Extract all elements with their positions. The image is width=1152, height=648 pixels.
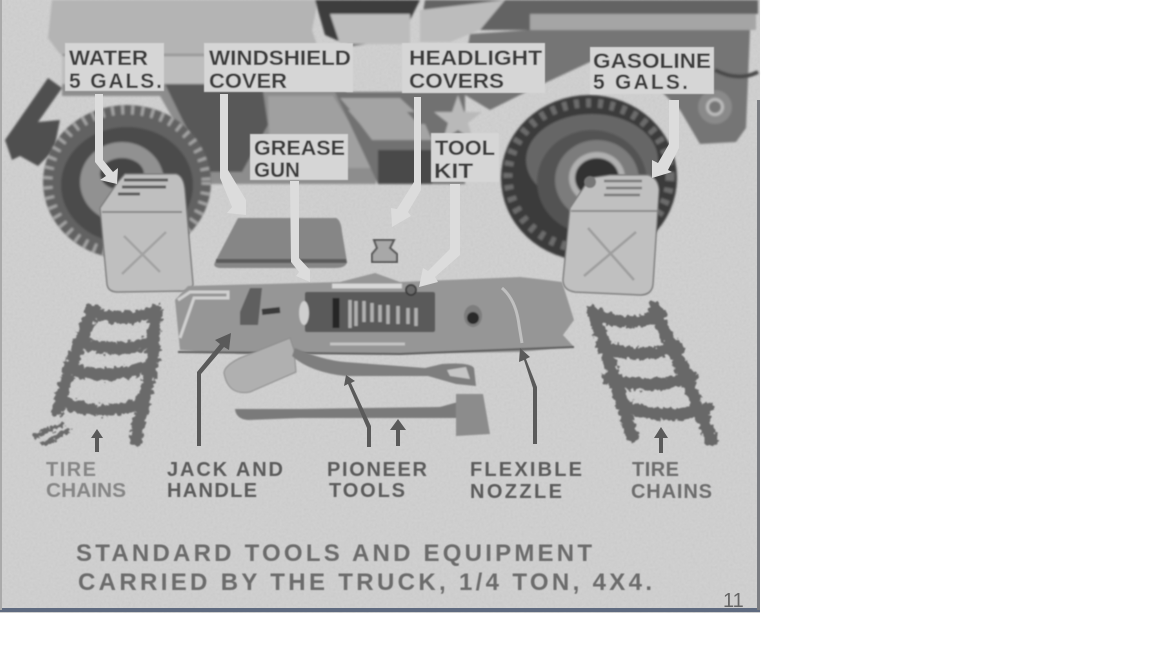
white arrow: gasoline: [652, 100, 679, 178]
jeep hood: [48, 0, 320, 54]
caption: STANDARD TOOLS AND EQUIPMENT: [76, 540, 592, 567]
arrow: flexible nozzle: [519, 348, 537, 444]
label: water 5 gals: [65, 43, 164, 93]
label: pioneer tools: [327, 459, 428, 502]
label: pioneer tools: PIONEER: [327, 459, 428, 481]
left spare wheel: [43, 105, 211, 259]
label: windshield cover: WINDSHIELD: [209, 47, 351, 70]
shovel: [224, 338, 476, 393]
page number: 11: [723, 590, 744, 612]
arrow: pioneer tools shovel: [344, 375, 371, 447]
arrow: pioneer tools axe: [390, 419, 406, 446]
axe: [235, 394, 490, 436]
white arrow: tool kit: [419, 184, 460, 287]
label: tire chains left: [46, 459, 126, 502]
right gasoline can: [563, 175, 659, 295]
label: tire chains left: TIRE: [46, 459, 96, 481]
photo page background: [0, 0, 760, 613]
left tire chains: [36, 310, 156, 444]
tool kit: [299, 285, 482, 344]
label: tire chains right: TIRE: [632, 459, 679, 481]
label: jack and handle: JACK AND: [167, 459, 283, 481]
label: windshield cover: [204, 43, 353, 93]
label: tool kit: TOOL: [435, 137, 495, 160]
label: gasoline 5 gals: GASOLINE: [593, 50, 711, 73]
label: grease gun: GUN: [254, 159, 300, 182]
arrow: jack and handle: [197, 333, 231, 446]
label: flexible nozzle: [470, 459, 582, 503]
jeep side: [62, 54, 400, 184]
tool roll tarp: [175, 273, 574, 354]
arrow: right tire chains: [654, 427, 668, 453]
jeep body: [5, 0, 758, 184]
label: tool kit: KIT: [434, 160, 473, 183]
label: water 5 gals: WATER: [69, 47, 148, 70]
label: tire chains right: CHAINS: [631, 481, 712, 503]
label: grease gun: [250, 134, 348, 182]
white arrow: headlight covers: [391, 97, 421, 227]
white arrow: water to can: [95, 94, 118, 184]
white arrow: grease gun: [290, 181, 310, 282]
caption: [76, 540, 652, 596]
flexible nozzle: [502, 288, 522, 343]
label: jack and handle: HANDLE: [167, 480, 257, 502]
label: headlight covers: [402, 43, 545, 93]
right spare wheel: [501, 95, 677, 261]
label: pioneer tools: TOOLS: [329, 480, 405, 502]
label: tire chains right: [631, 459, 712, 503]
label: headlight covers: COVERS: [409, 70, 504, 93]
label: gasoline 5 gals: 5 GALS.: [593, 71, 688, 94]
label: windshield cover: COVER: [209, 70, 287, 93]
arrow: left tire chains: [91, 429, 103, 452]
label: flexible nozzle: FLEXIBLE: [470, 459, 582, 481]
label: tire chains left: CHAINS: [46, 480, 126, 502]
label: grease gun: GREASE: [254, 137, 345, 160]
label: water 5 gals: 5 GALS.: [69, 70, 162, 93]
caption: CARRIED BY THE TRUCK, 1/4 TON, 4X4.: [78, 569, 652, 596]
label: tool kit: [431, 133, 499, 183]
label: flexible nozzle: NOZZLE: [470, 481, 562, 503]
label: gasoline 5 gals: [590, 47, 714, 94]
label: jack and handle: [167, 459, 283, 502]
windshield cover: [214, 218, 347, 268]
headlight covers: [372, 240, 397, 262]
label: headlight covers: HEADLIGHT: [409, 47, 542, 70]
right tire chains: [594, 308, 712, 440]
left water can: [100, 174, 193, 292]
white arrow: windshield cover: [220, 94, 246, 215]
